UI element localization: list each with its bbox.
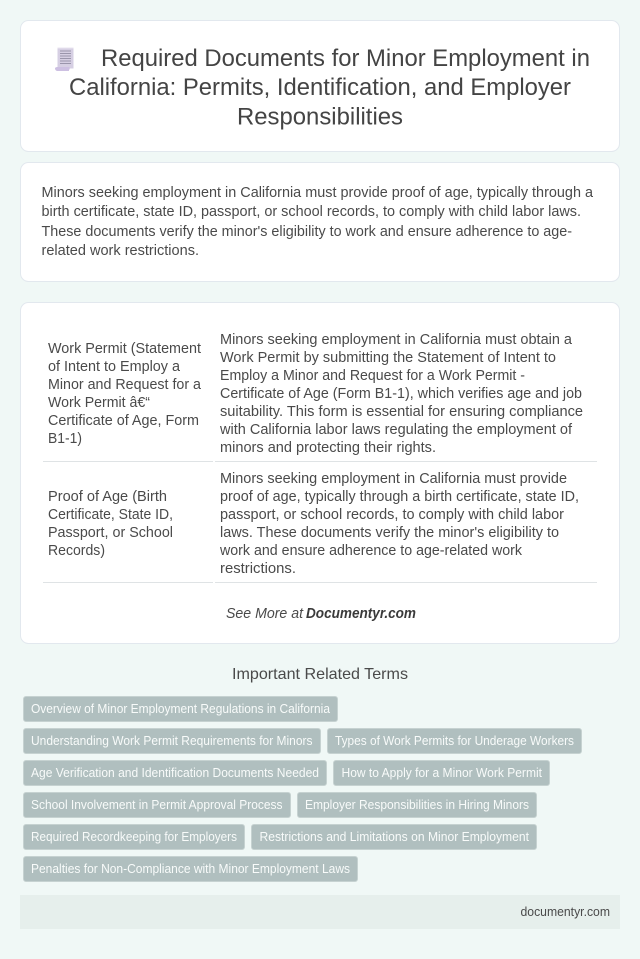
table cell: work permit name: Work Permit (Statement (48, 341, 201, 357)
link: see more (226, 606, 416, 622)
tag: overview: Overview of Minor Employment Regulations in California (31, 702, 330, 716)
table cell: proof of age name (48, 489, 173, 559)
footer bar (20, 895, 620, 929)
text block: introduction: birth certificate, state ID, passport, or school records, to comply with child labor laws. (42, 204, 581, 220)
table cell: work permit name: B1-1) (48, 431, 82, 447)
table row: proof of age (48, 471, 579, 577)
tag: how to apply (334, 760, 550, 786)
table cell: proof of age description: work and ensure adherence to age-related work (219, 543, 523, 559)
link: see more: See More at (226, 606, 304, 622)
tag: school involvement (24, 792, 290, 818)
heading: page title: Required Documents for Minor Employment in (101, 45, 590, 72)
table cell: proof of age name: Proof of Age (Birth (48, 489, 167, 505)
panel: documents table card (20, 302, 620, 644)
tag list: related terms (24, 696, 582, 882)
text block: introduction: These documents verify the minor's eligibility to work and ensure adherence to age- (42, 224, 572, 240)
heading: page title (69, 45, 590, 130)
table cell: work permit description: Certificate of Age (Form B1-1), which verifies age and job (220, 386, 582, 402)
text block: introduction: Minors seeking employment in California must provide proof of age, typically through a (42, 185, 594, 201)
tag: understanding work permit (24, 728, 320, 754)
table cell: work permit name: Certificate of Age, Form (48, 413, 199, 429)
tag: school involvement: School Involvement in Permit Approval Process (31, 798, 282, 812)
table cell: work permit description: Employ a Minor and Request for a Work Permit - (220, 368, 525, 384)
tag: how to apply: How to Apply for a Minor Work Permit (342, 766, 542, 780)
table cell: work permit name: Minor and Request for a (48, 377, 202, 393)
table cell: proof of age description: laws. These documents verify the minor's eligibility to (220, 525, 559, 541)
text block: introduction (42, 185, 594, 259)
table cell: work permit description: with California labor laws regulating the employment of (219, 422, 573, 438)
tag: types of permits: Types of Work Permits for Underage Workers (335, 734, 574, 748)
heading: page title: Responsibilities (237, 104, 403, 130)
tag: recordkeeping: Required Recordkeeping for Employers (31, 830, 237, 844)
tag: restrictions (252, 824, 536, 850)
table cell: proof of age description: proof of age, typically through a birth certificate, state ID, (220, 489, 579, 505)
tag: employer responsibilities (298, 792, 536, 818)
tag: types of permits (328, 728, 582, 754)
tag: penalties: Penalties for Non-Compliance with Minor Employment Laws (31, 862, 350, 876)
tag: understanding work permit: Understanding Work Permit Requirements for Minors (31, 734, 312, 748)
table cell: work permit name (48, 341, 202, 447)
tag: recordkeeping (24, 824, 244, 850)
table cell: work permit description: Work Permit by submitting the Statement of Intent to (220, 350, 556, 366)
table cell: proof of age description: Minors seeking employment in California must provide (220, 471, 567, 487)
table cell: proof of age description (219, 471, 579, 577)
table cell: proof of age description: passport, or school records, to comply with child labor (220, 507, 564, 523)
tag: restrictions: Restrictions and Limitations on Minor Employment (260, 830, 529, 844)
tag: employer responsibilities: Employer Responsibilities in Hiring Minors (305, 798, 529, 812)
link: see more: Documentyr.com (306, 606, 416, 622)
icon: document scroll (55, 48, 74, 71)
text block: introduction: related work restrictions. (42, 243, 199, 259)
heading: page title: California: Permits, Identification, and Employer (69, 74, 571, 101)
table cell: proof of age name: Passport, or School (48, 525, 173, 541)
panel: introduction card (20, 162, 620, 282)
footer bar: documentyr.com (520, 904, 610, 919)
tag: age verification (24, 760, 326, 786)
table cell: work permit description (219, 332, 583, 456)
table cell: work permit description: Minors seeking employment in California must obtain a (220, 332, 573, 348)
tag: overview (24, 696, 338, 722)
tag: age verification: Age Verification and Identification Documents Needed (31, 766, 319, 780)
table row: work permit (48, 332, 583, 456)
panel: title card (20, 20, 620, 152)
table cell: work permit description: suitability. This form is essential for ensuring compliance (220, 404, 583, 420)
table cell: proof of age name: Records) (48, 543, 105, 559)
heading: important related terms: Important Related Terms (232, 666, 408, 683)
table cell: proof of age name: Certificate, State ID, (48, 507, 173, 523)
tag: penalties (24, 856, 358, 882)
table cell: work permit description: minors and protecting their rights. (220, 440, 436, 456)
table cell: work permit name: of Intent to Employ a (48, 359, 181, 375)
table cell: proof of age description: restrictions. (220, 561, 296, 577)
table cell: work permit name: Work Permit â€“ (48, 395, 150, 411)
